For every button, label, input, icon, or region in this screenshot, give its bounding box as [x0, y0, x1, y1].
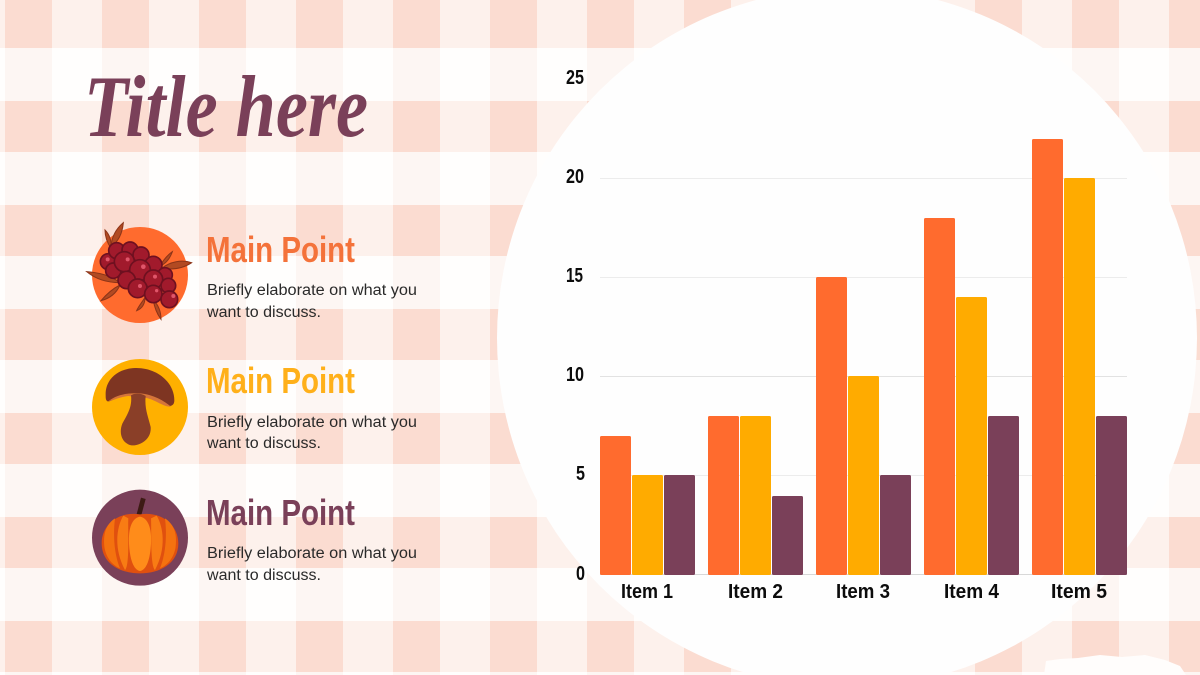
heading: main point: Main Point: [206, 229, 355, 270]
text block: want to discuss.: [206, 567, 321, 584]
bars: item 2: [708, 416, 803, 575]
panel: white circle behind chart: [497, 0, 1197, 675]
torn white paper patch: [1044, 655, 1186, 675]
y axis labels: 15: [566, 265, 583, 287]
text block: Briefly elaborate on what you: [207, 414, 417, 431]
icon: mushroom: [92, 359, 188, 455]
title: Title here: [84, 59, 368, 156]
list item 1: berries: [87, 223, 417, 323]
bars: item 5: [1032, 139, 1127, 575]
text block: Briefly elaborate on what you: [207, 545, 417, 562]
text block: want to discuss.: [206, 304, 321, 321]
icon: pumpkin: [92, 490, 188, 586]
heading: main point: Main Point: [206, 360, 355, 401]
x axis labels: Item 1: [621, 581, 673, 603]
bars: item 4: [924, 218, 1019, 575]
y axis labels: 0: [576, 563, 585, 585]
text block: Briefly elaborate on what you: [207, 282, 417, 299]
text block: want to discuss.: [206, 435, 321, 452]
y axis labels: 5: [576, 463, 585, 485]
icon: berries: [87, 223, 192, 323]
x axis labels: Item 5: [1051, 581, 1107, 603]
bars: item 1: [600, 436, 695, 575]
bar chart: [566, 67, 1127, 603]
x axis labels: Item 4: [944, 581, 1000, 603]
list item 2: mushroom: [92, 359, 417, 455]
x axis labels: [621, 581, 1107, 603]
list item 3: pumpkin: [92, 490, 417, 586]
x axis labels: Item 2: [728, 581, 783, 603]
y axis labels: 25: [566, 67, 584, 89]
bars: item 3: [816, 277, 911, 575]
heading: main point: Main Point: [206, 492, 355, 533]
y axis labels: [566, 67, 585, 585]
x axis labels: Item 3: [836, 581, 890, 603]
y axis labels: 10: [566, 364, 584, 386]
y axis labels: 20: [566, 166, 584, 188]
